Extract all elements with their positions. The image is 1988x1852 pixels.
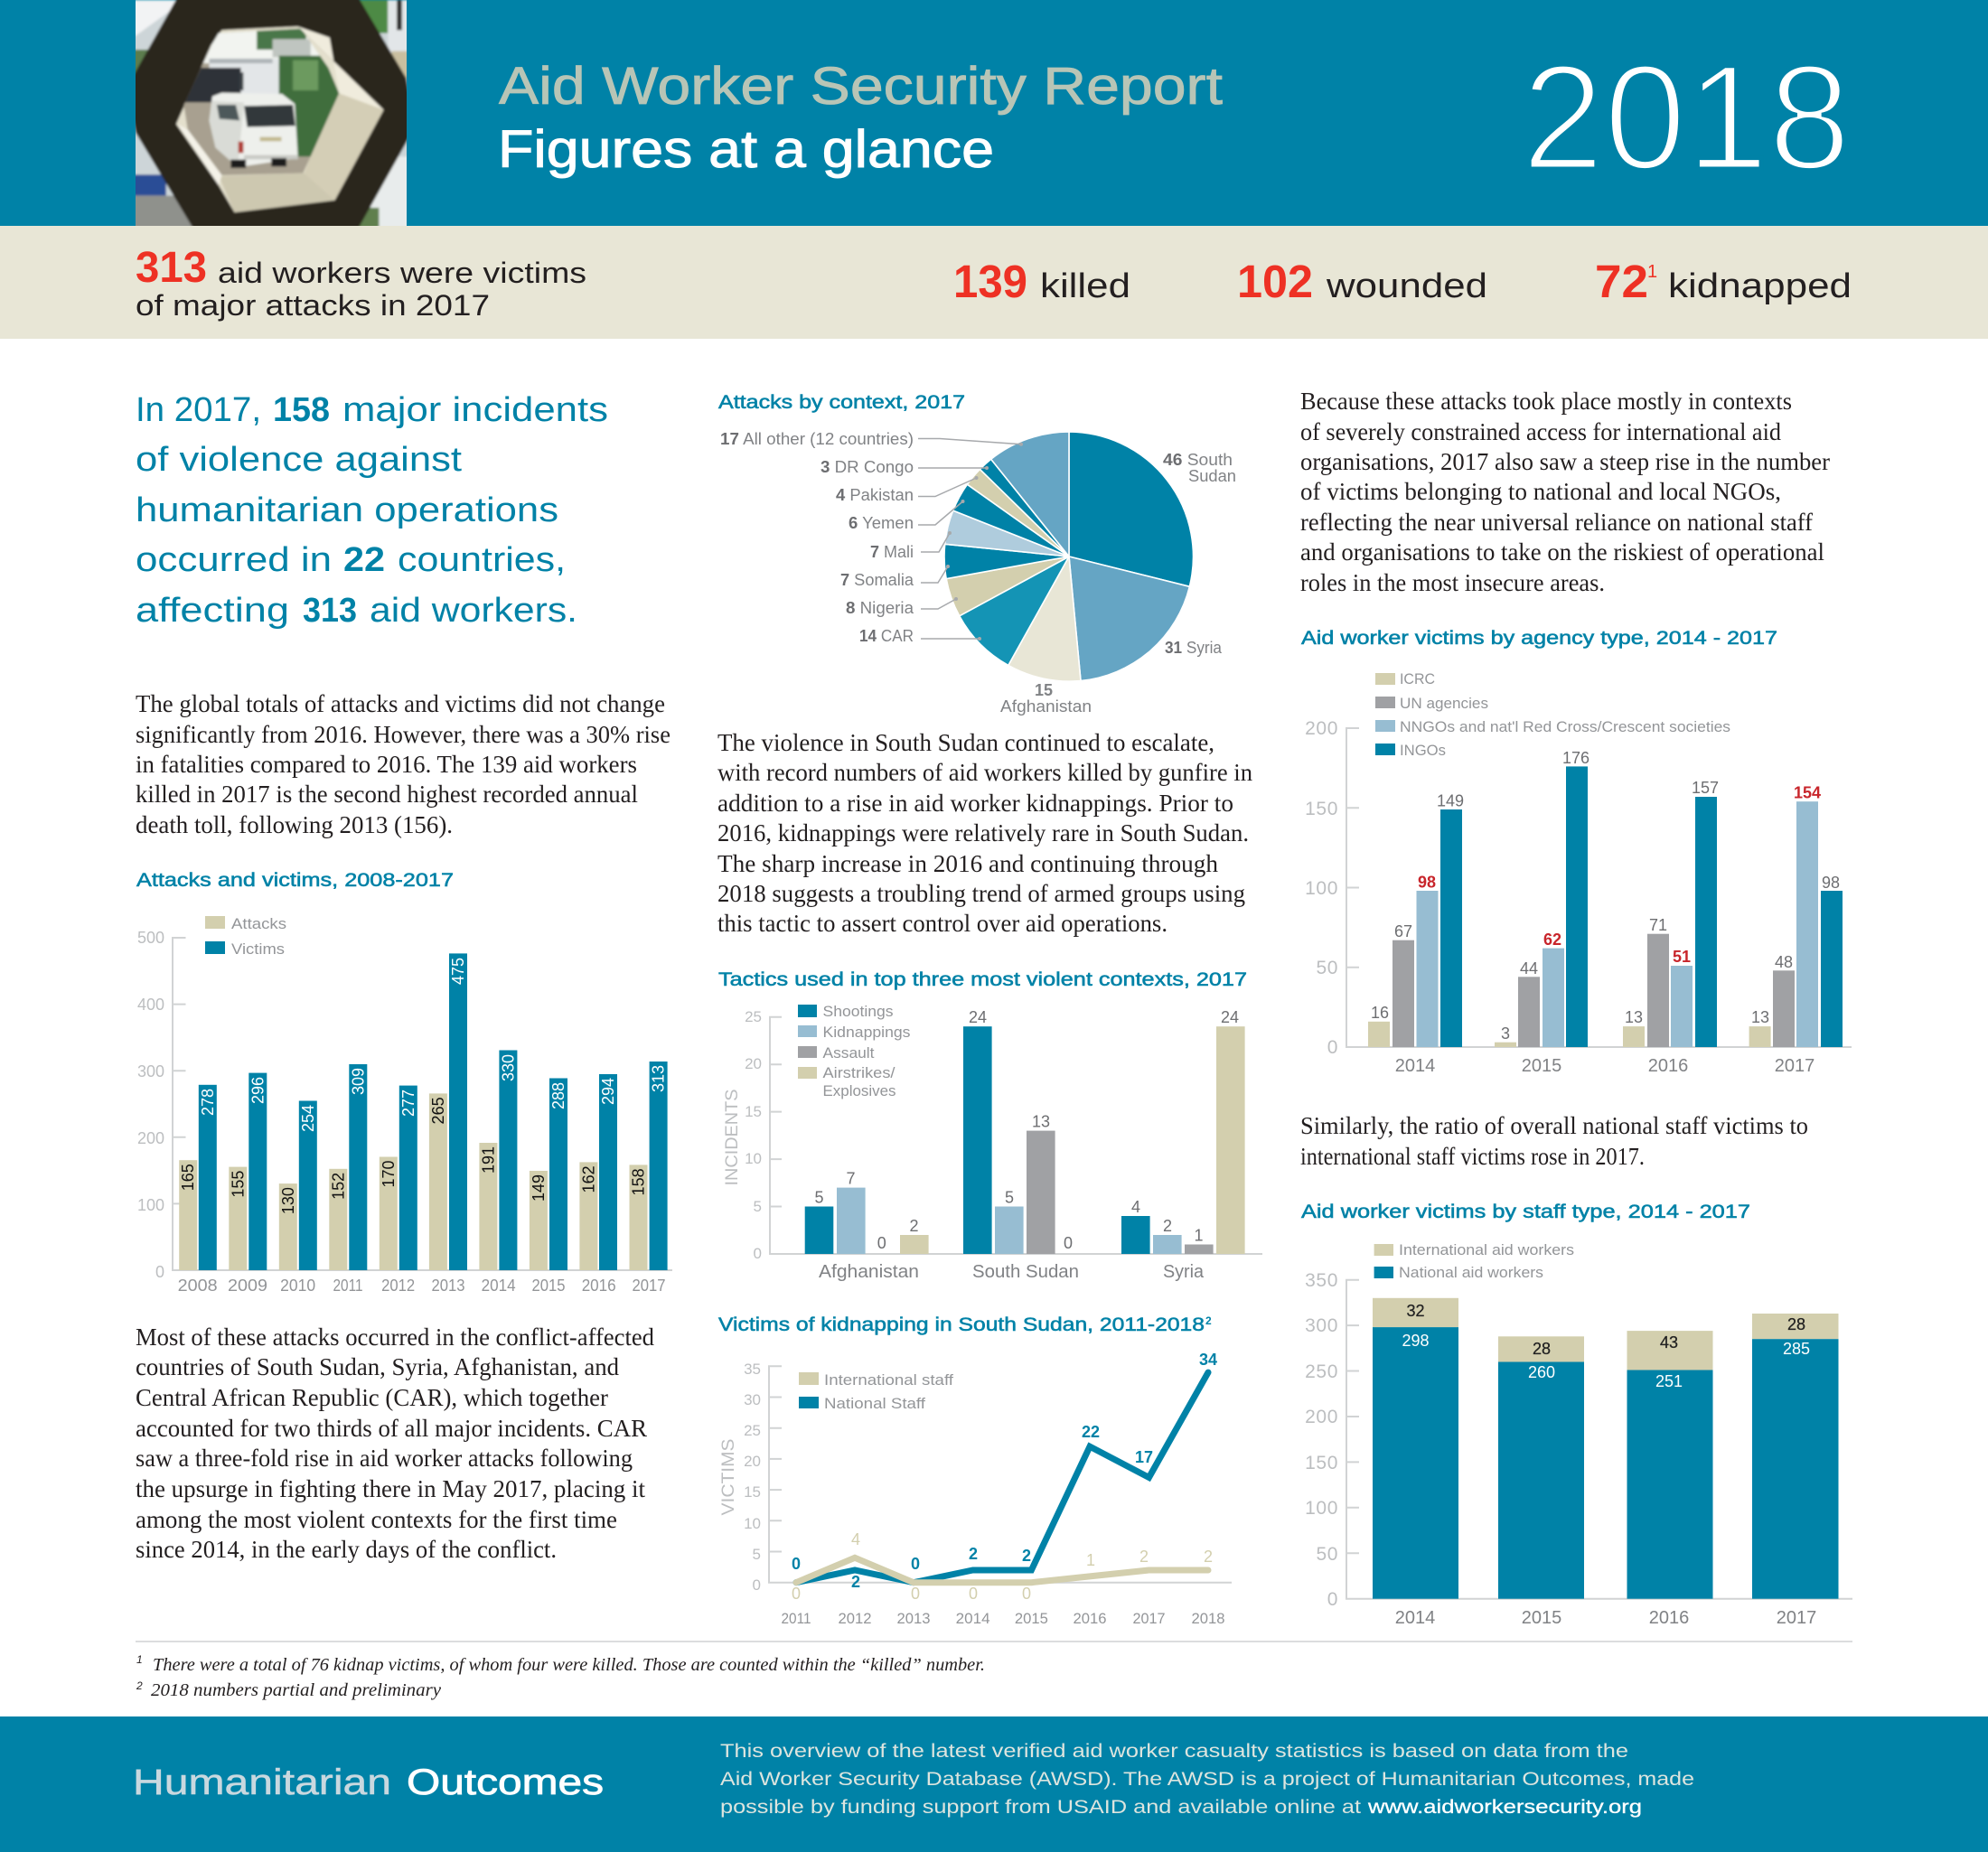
- heading: kidnapping victims: Victims of kidnapping in South Sudan, 2011-2018: [718, 1314, 1205, 1335]
- text block: conflict-affected countries: since 2014, in the early days of the conflict.: [136, 1536, 557, 1563]
- total victims: aid workers were victims: [218, 257, 586, 289]
- y axis labels: 15: [744, 1483, 761, 1501]
- slice labels right and bottom: 31 Syria: [1165, 639, 1223, 657]
- bars: Syria: 1: [1194, 1227, 1204, 1245]
- text block: national NGOs: and organisations to take on the riskiest of operational: [1300, 538, 1824, 566]
- attacks values: 130: [279, 1187, 297, 1214]
- lead statement: 158: [273, 391, 330, 429]
- y axis labels: 30: [744, 1391, 761, 1408]
- header band: [0, 0, 1988, 229]
- text block: conflict-affected countries: [136, 1324, 654, 1563]
- kidnapped: [1595, 256, 1852, 307]
- text block: conflict-affected countries: Most of these attacks occurred in the conflict-affected: [136, 1324, 654, 1351]
- text block: national NGOs: Because these attacks took place mostly in contexts: [1300, 388, 1792, 415]
- text block: staff ratio: Similarly, the ratio of overall national staff victims to: [1300, 1112, 1808, 1139]
- y axis labels: 100: [1305, 878, 1338, 899]
- text block: national NGOs: organisations, 2017 also saw a steep rise in the number: [1300, 448, 1830, 475]
- victims values: 296: [248, 1077, 267, 1104]
- national staff values: 22: [1082, 1423, 1100, 1441]
- y axis labels: 250: [1305, 1361, 1338, 1382]
- heading: agency type: Aid worker victims by agency type, 2014 - 2017: [1301, 628, 1777, 649]
- lead statement: aid workers.: [370, 592, 577, 630]
- text block: national NGOs: of severely constrained access for international aid: [1300, 418, 1781, 445]
- lead statement: occurred in: [136, 541, 332, 579]
- legend: INGOs: [1400, 742, 1446, 759]
- attacks values: 155: [229, 1171, 247, 1198]
- bars: Syria: 4: [1131, 1198, 1140, 1216]
- bars: South Sudan: 24: [969, 1008, 987, 1026]
- bars 2015: 44: [1520, 959, 1538, 977]
- attacks values: 158: [629, 1168, 647, 1195]
- stacked bar chart: victims by staff type: [1305, 1241, 1852, 1628]
- victims bars: [199, 953, 668, 1270]
- category labels: Syria: [1163, 1262, 1205, 1282]
- legend: Shootings: [822, 1003, 893, 1020]
- heading: attacks by context: Attacks by context, 2017: [718, 392, 965, 413]
- footer text: This overview of the latest verified aid worker casualty statistics is based on data from the: [720, 1741, 1628, 1762]
- slice labels right and bottom: 46 South: [1163, 451, 1233, 469]
- slice labels left: 7 Somalia: [840, 571, 914, 589]
- lead statement: 313: [303, 592, 357, 630]
- attacks values: 152: [329, 1173, 347, 1200]
- line: international staff: [796, 1557, 1208, 1583]
- national staff values: 0: [911, 1555, 920, 1573]
- y axis labels: 50: [1316, 958, 1338, 978]
- y axis labels: [1305, 718, 1338, 1058]
- victims values: 277: [399, 1090, 417, 1117]
- bars 2015: 176: [1562, 749, 1589, 767]
- y axis labels: 5: [754, 1198, 762, 1215]
- bars 2016: 51: [1673, 948, 1691, 966]
- year labels: 2008: [178, 1277, 218, 1295]
- text block: global totals: death toll, following 2013 (156).: [136, 811, 453, 838]
- year labels: 2014: [1395, 1608, 1435, 1628]
- year labels: 2015: [1522, 1608, 1561, 1628]
- y axis labels: 50: [1316, 1544, 1338, 1565]
- year 2018: 2018: [1522, 34, 1851, 201]
- legend: Assault: [822, 1044, 875, 1062]
- text block: conflict-affected countries: saw a three-fold rise in aid worker attacks following: [136, 1445, 633, 1472]
- text block: South Sudan: The sharp increase in 2016 and continuing through: [717, 850, 1218, 877]
- leader lines: [918, 439, 1021, 639]
- stack 2016: 251: [1655, 1372, 1683, 1390]
- organisation name: Outcomes: [407, 1763, 604, 1802]
- text block: South Sudan: with record numbers of aid workers killed by gunfire in: [717, 759, 1252, 786]
- lead statement: 22: [343, 541, 385, 579]
- text block: national NGOs: of victims belonging to national and local NGOs,: [1300, 478, 1781, 505]
- y axis labels: 25: [745, 1008, 762, 1025]
- line chart: kidnapping victims: [719, 1351, 1232, 1627]
- victims values: 330: [499, 1054, 517, 1081]
- victims values: 475: [449, 958, 467, 985]
- slice labels left: 14 CAR: [859, 627, 914, 645]
- leader dots: [946, 443, 1023, 641]
- killed: 139: [953, 256, 1027, 307]
- bars 2014: 149: [1437, 791, 1464, 809]
- bars: South Sudan: 0: [1064, 1234, 1073, 1252]
- slice labels left: 7 Mali: [870, 543, 914, 561]
- footnotes: 2: [136, 1679, 143, 1692]
- national staff values: 17: [1135, 1448, 1153, 1466]
- international staff values: 2: [1204, 1548, 1213, 1566]
- y axis labels: 20: [744, 1453, 761, 1470]
- footnotes: 1: [136, 1653, 143, 1666]
- text block: South Sudan: this tactic to assert control over aid operations.: [717, 910, 1167, 937]
- victims values: 309: [349, 1068, 367, 1095]
- international staff values: 4: [851, 1530, 860, 1548]
- victims values: 313: [650, 1065, 668, 1092]
- footnotes: [136, 1653, 985, 1700]
- year labels: 2013: [896, 1610, 931, 1627]
- year labels: 2015: [1015, 1610, 1048, 1627]
- year labels: 2014: [1395, 1056, 1435, 1076]
- text block: national NGOs: reflecting the near universal reliance on national staff: [1300, 509, 1813, 536]
- summary band: [0, 226, 1988, 339]
- legend: [1374, 1241, 1574, 1281]
- international staff values: 0: [792, 1585, 801, 1603]
- heading: kidnapping victims: 2: [1205, 1314, 1212, 1327]
- y axis title: VICTIMS: [719, 1439, 738, 1515]
- bars: Afghanistan: [805, 1169, 929, 1254]
- stack 2016: 43: [1660, 1333, 1678, 1352]
- stack 2014: 32: [1406, 1302, 1425, 1320]
- bars 2017: 98: [1822, 874, 1840, 892]
- text block: staff ratio: [1300, 1112, 1808, 1170]
- y axis labels: [137, 929, 164, 1281]
- y axis labels: [745, 1008, 762, 1262]
- text block: national NGOs: [1300, 388, 1830, 596]
- text block: conflict-affected countries: the upsurge in fighting there in May 2017, placing it: [136, 1475, 645, 1502]
- stack 2017: 285: [1783, 1340, 1810, 1358]
- year labels: 2016: [1074, 1610, 1106, 1627]
- text block: global totals: killed in 2017 is the second highest recorded annual: [136, 781, 638, 808]
- text block: staff ratio: international staff victims rose in 2017.: [1300, 1143, 1645, 1170]
- bars: South Sudan: 13: [1032, 1113, 1050, 1131]
- bars 2017: 154: [1794, 784, 1821, 802]
- national staff values: 0: [792, 1555, 801, 1573]
- slice labels left: 3 DR Congo: [821, 458, 914, 476]
- pie chart: attacks by context: [720, 430, 1236, 716]
- y axis labels: 300: [1305, 1315, 1338, 1336]
- bars 2016: [1623, 779, 1719, 1047]
- line: national staff: [796, 1372, 1208, 1583]
- national staff values: 34: [1199, 1351, 1217, 1369]
- heading: attacks and victims: Attacks and victims, 2008-2017: [136, 870, 454, 891]
- year labels: [178, 1277, 666, 1295]
- text block: conflict-affected countries: among the most violent contexts for the first time: [136, 1506, 617, 1533]
- year labels: 2012: [839, 1610, 871, 1627]
- year labels: 2015: [1522, 1056, 1561, 1076]
- legend: Victims: [231, 940, 285, 958]
- national staff values: 2: [1022, 1547, 1031, 1565]
- legend: NNGOs and nat'l Red Cross/Crescent societies: [1400, 718, 1730, 735]
- text block: conflict-affected countries: countries of South Sudan, Syria, Afghanistan, and: [136, 1353, 619, 1380]
- lead statement: major incidents: [342, 391, 608, 429]
- y axis labels: 20: [745, 1055, 762, 1072]
- lead statement: In 2017,: [136, 391, 261, 429]
- bars 2014: [1368, 791, 1464, 1047]
- year labels: [1395, 1056, 1815, 1076]
- y axis labels: 150: [1305, 799, 1338, 819]
- bars: Syria: 2: [1163, 1217, 1172, 1235]
- y axis labels: 400: [137, 996, 164, 1014]
- y axis labels: [1305, 1270, 1338, 1610]
- legend: ICRC: [1400, 670, 1435, 687]
- bars 2017: 48: [1775, 953, 1793, 971]
- year labels: 2017: [1775, 1056, 1815, 1076]
- bars 2016: 71: [1649, 916, 1667, 934]
- y axis labels: [744, 1361, 761, 1594]
- y axis labels: 0: [1327, 1589, 1338, 1610]
- y axis labels: 0: [1327, 1037, 1338, 1058]
- bar chart: victims by agency type: [1305, 670, 1852, 1076]
- footer text: www.aidworkersecurity.org: [1367, 1797, 1642, 1818]
- year labels: 2015: [531, 1277, 566, 1295]
- victims values: [199, 958, 668, 1132]
- slice labels right and bottom: Sudan: [1188, 467, 1236, 485]
- bars 2015: 62: [1543, 931, 1561, 949]
- legend: Airstrikes/: [822, 1064, 896, 1081]
- category labels: South Sudan: [972, 1262, 1079, 1282]
- wounded: wounded: [1326, 267, 1487, 305]
- y axis labels: 10: [745, 1150, 762, 1167]
- bars: Afghanistan: 7: [846, 1169, 856, 1187]
- text block: South Sudan: The violence in South Sudan continued to escalate,: [717, 729, 1214, 756]
- stack 2015: 28: [1533, 1340, 1551, 1358]
- international staff values: 1: [1086, 1551, 1095, 1569]
- national staff values: 2: [969, 1545, 978, 1563]
- legend: [799, 1371, 953, 1412]
- y axis labels: 5: [753, 1546, 761, 1563]
- y axis labels: 25: [744, 1422, 761, 1439]
- bars 2017: 13: [1751, 1008, 1769, 1026]
- stack 2014: [1373, 1298, 1458, 1599]
- bars 2014: 16: [1371, 1004, 1389, 1022]
- footnotes: 2018 numbers partial and preliminary: [151, 1680, 441, 1700]
- footer text: [720, 1741, 1694, 1818]
- attacks values: [179, 1097, 647, 1214]
- wounded: 102: [1237, 256, 1313, 307]
- bars: Afghanistan: 5: [814, 1189, 824, 1207]
- bars 2017: [1749, 784, 1843, 1047]
- slice labels right and bottom: Afghanistan: [1000, 697, 1092, 716]
- victims values: 254: [299, 1105, 317, 1132]
- y axis labels: 0: [753, 1576, 761, 1594]
- kidnapped: 1: [1647, 262, 1657, 282]
- attacks values: 149: [530, 1174, 548, 1202]
- attacks values: 191: [479, 1146, 497, 1174]
- killed: killed: [1040, 267, 1130, 305]
- heading: tactics: Tactics used in top three most violent contexts, 2017: [718, 969, 1247, 990]
- year labels: 2011: [333, 1277, 363, 1295]
- year labels: [781, 1610, 1225, 1627]
- bar chart: attacks and victims 2008-2017: [137, 915, 672, 1295]
- victims values: 278: [199, 1089, 217, 1116]
- total victims: 313: [136, 244, 207, 292]
- year labels: 2018: [1191, 1610, 1225, 1627]
- report title: Aid Worker Security Report: [499, 57, 1223, 116]
- total victims: of major attacks in 2017: [136, 289, 490, 322]
- year labels: 2011: [781, 1610, 811, 1627]
- bars 2016: 13: [1625, 1008, 1643, 1026]
- y axis labels: 10: [744, 1515, 761, 1532]
- legend: [798, 1003, 911, 1099]
- slice labels right and bottom: 15: [1035, 681, 1053, 699]
- y axis labels: 100: [137, 1196, 164, 1214]
- y axis labels: 35: [744, 1361, 761, 1378]
- legend: National Staff: [824, 1395, 925, 1412]
- total victims: [136, 244, 586, 322]
- year labels: 2009: [228, 1277, 267, 1295]
- bars: Syria: 24: [1221, 1008, 1239, 1026]
- attacks values: 165: [179, 1164, 197, 1191]
- stack 2015: 260: [1528, 1363, 1555, 1381]
- kidnapped: kidnapped: [1668, 267, 1852, 305]
- year labels: [1395, 1608, 1816, 1628]
- year labels: 2017: [1777, 1608, 1816, 1628]
- year labels: 2014: [956, 1610, 990, 1627]
- international staff values: 2: [1139, 1548, 1149, 1566]
- attacks values: 162: [579, 1165, 597, 1193]
- slice labels left: 6 Yemen: [849, 514, 914, 532]
- bars 2015: [1495, 749, 1589, 1047]
- legend: UN agencies: [1400, 695, 1488, 712]
- footer text: possible by funding support from USAID and available online at: [720, 1797, 1361, 1818]
- wounded: [1237, 256, 1487, 307]
- text block: global totals: [136, 690, 670, 838]
- organisation name: [133, 1763, 604, 1802]
- stack 2017: 28: [1787, 1315, 1805, 1333]
- y axis labels: 0: [754, 1245, 762, 1262]
- bars 2015: 3: [1501, 1024, 1510, 1043]
- slice labels left: [720, 430, 914, 645]
- bars 2014: 67: [1394, 922, 1412, 940]
- y axis labels: 300: [137, 1062, 164, 1080]
- slice labels right and bottom: [1000, 451, 1236, 716]
- y axis labels: 500: [137, 929, 164, 947]
- year labels: 2016: [582, 1277, 616, 1295]
- legend: National aid workers: [1399, 1264, 1543, 1281]
- international staff values: 0: [911, 1585, 920, 1603]
- bars: Afghanistan: 2: [909, 1217, 919, 1235]
- legend: Attacks: [231, 915, 286, 932]
- international staff values: 0: [969, 1585, 978, 1603]
- victims values: 294: [599, 1078, 617, 1105]
- lead statement: countries,: [398, 541, 566, 579]
- y axis labels: 100: [1305, 1498, 1338, 1519]
- kidnapped: 72: [1595, 256, 1648, 307]
- attacks values: 265: [429, 1097, 447, 1124]
- y axis labels: 150: [1305, 1453, 1338, 1473]
- text block: South Sudan: 2016, kidnappings were relatively rare in South Sudan.: [717, 819, 1249, 846]
- international staff values: [792, 1530, 1213, 1603]
- stack 2015: [1498, 1336, 1584, 1599]
- text block: South Sudan: addition to a rise in aid worker kidnappings. Prior to: [717, 790, 1233, 817]
- lead statement: of violence against: [136, 441, 463, 479]
- legend: International aid workers: [1399, 1241, 1574, 1258]
- legend: Explosives: [822, 1082, 896, 1099]
- bars: South Sudan: [963, 1008, 1073, 1254]
- report title: Figures at a glance: [498, 120, 994, 179]
- slice labels left: 17 All other (12 countries): [720, 430, 914, 448]
- footnotes: There were a total of 76 kidnap victims, of whom four were killed. Those are counted within the “killed” number.: [153, 1655, 985, 1675]
- y axis labels: 200: [137, 1129, 164, 1147]
- bars 2016: 157: [1692, 779, 1719, 797]
- attacks values: 170: [380, 1160, 398, 1188]
- y axis labels: 350: [1305, 1270, 1338, 1291]
- text block: South Sudan: 2018 suggests a troubling trend of armed groups using: [717, 880, 1245, 907]
- year labels: 2016: [1649, 1608, 1689, 1628]
- text block: global totals: The global totals of attacks and victims did not change: [136, 690, 665, 717]
- year labels: 2010: [280, 1277, 315, 1295]
- attacks bars: [179, 1093, 647, 1270]
- photo: van seen through hexagonal concrete block: [127, 0, 415, 229]
- y axis labels: 200: [1305, 1407, 1338, 1427]
- legend: [1375, 670, 1730, 759]
- bars 2014: 98: [1418, 873, 1436, 891]
- year labels: 2016: [1648, 1056, 1688, 1076]
- y axis labels: 15: [745, 1103, 762, 1120]
- y axis labels: 0: [155, 1263, 164, 1281]
- slice labels left: 4 Pakistan: [836, 486, 914, 504]
- year labels: 2012: [381, 1277, 415, 1295]
- national staff values: 2: [851, 1573, 860, 1591]
- legend: Kidnappings: [822, 1024, 911, 1041]
- legend: International staff: [824, 1371, 953, 1389]
- bars: South Sudan: 5: [1005, 1189, 1014, 1207]
- year labels: 2013: [432, 1277, 464, 1295]
- legend: [205, 915, 286, 958]
- text block: conflict-affected countries: Central African Republic (CAR), which together: [136, 1384, 608, 1411]
- footer band: [0, 1716, 1988, 1852]
- footer text: Aid Worker Security Database (AWSD). The AWSD is a project of Humanitarian Outcomes, made: [720, 1769, 1694, 1790]
- category labels: [819, 1262, 1205, 1282]
- stack 2016: [1627, 1331, 1713, 1599]
- year labels: 2017: [1133, 1610, 1166, 1627]
- killed: [953, 256, 1130, 307]
- y axis title: INCIDENTS: [723, 1090, 742, 1185]
- category labels: Afghanistan: [819, 1262, 919, 1282]
- text block: national NGOs: roles in the most insecure areas.: [1300, 569, 1605, 596]
- text block: global totals: in fatalities compared to 2016. The 139 aid workers: [136, 751, 637, 778]
- international staff values: 0: [1022, 1585, 1031, 1603]
- lead statement: humanitarian operations: [136, 491, 558, 529]
- stack 2014: 298: [1402, 1332, 1430, 1350]
- national staff values: [792, 1351, 1217, 1591]
- report title: [498, 57, 1223, 179]
- stack 2017: [1752, 1314, 1838, 1599]
- bars: Syria: [1121, 1008, 1245, 1254]
- year labels: 2014: [482, 1277, 516, 1295]
- bars: Afghanistan: 0: [877, 1234, 886, 1252]
- slice labels left: 8 Nigeria: [846, 599, 914, 617]
- pie slices: [944, 432, 1193, 681]
- heading: staff type: Aid worker victims by staff type, 2014 - 2017: [1301, 1202, 1750, 1222]
- y axis labels: 200: [1305, 718, 1338, 739]
- text block: conflict-affected countries: accounted for two thirds of all major incidents. CAR: [136, 1415, 647, 1442]
- year labels: 2017: [633, 1277, 665, 1295]
- organisation name: Humanitarian: [133, 1763, 391, 1802]
- lead statement: affecting: [136, 592, 289, 630]
- text block: South Sudan: [717, 729, 1252, 937]
- text block: global totals: significantly from 2016. However, there was a 30% rise: [136, 721, 670, 748]
- bar chart: tactics: [723, 1003, 1262, 1282]
- lead statement: [136, 391, 608, 630]
- victims values: 288: [549, 1082, 567, 1109]
